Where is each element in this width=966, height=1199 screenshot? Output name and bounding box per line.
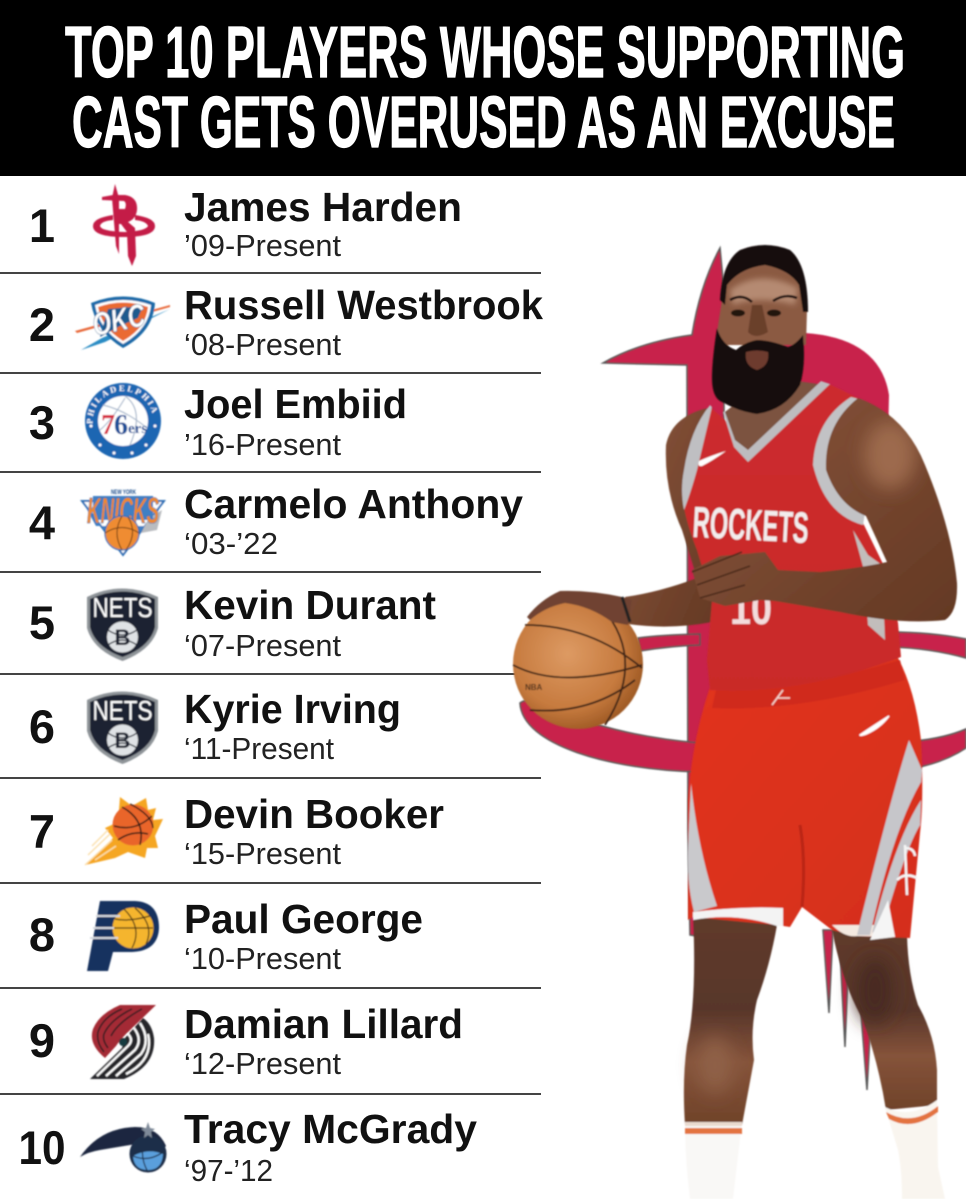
row 2: Russell Westbrook: Russell Westbrook [184, 282, 543, 328]
row 4: Carmelo Anthony: 4 [29, 496, 55, 549]
icon: 76ers logo: 6 [114, 410, 128, 441]
icon: Magic logo [80, 1122, 166, 1172]
row 10: Tracy McGrady: Tracy McGrady [184, 1106, 477, 1152]
jersey: ROCKETS [691, 498, 810, 553]
head [712, 245, 808, 414]
row 10: Tracy McGrady: ‘97-’12 [184, 1153, 273, 1188]
row 4: Carmelo Anthony: Carmelo Anthony [184, 481, 523, 527]
row 5: Kevin Durant: 5 [29, 596, 55, 649]
row 3: Joel Embiid: ’16-Present [184, 427, 341, 462]
basketball: NBA [525, 683, 543, 692]
icon: 76ers logo: 7 [101, 410, 115, 441]
legs [684, 915, 937, 1125]
row 9: Damian Lillard: Damian Lillard [184, 1001, 463, 1047]
icon: 76ers logo [84, 382, 162, 460]
eyes and brows [730, 296, 797, 302]
row 7: Devin Booker: ‘15-Present [184, 836, 341, 871]
row 8: Paul George: 8 [29, 908, 55, 961]
row 10: Tracy McGrady [18, 1106, 477, 1188]
icon: Nets logo [87, 692, 158, 764]
row 9: Damian Lillard [29, 1001, 463, 1081]
row 10: Tracy McGrady: 10 [18, 1121, 66, 1174]
row 5: Kevin Durant: ‘07-Present [184, 628, 341, 663]
row 1: James Harden [29, 184, 462, 266]
hair [720, 245, 808, 312]
row 3: Joel Embiid [29, 381, 407, 462]
socks [685, 1100, 945, 1199]
title banner [0, 0, 966, 176]
mouth [746, 350, 768, 370]
row 2: Russell Westbrook: ‘08-Present [184, 327, 341, 362]
icon: Knicks logo: NEW YORK [111, 490, 136, 496]
dribbling hand [527, 591, 632, 625]
icon: Pacers logo [87, 901, 159, 971]
row 8: Paul George: ‘10-Present [184, 941, 341, 976]
row 5: Kevin Durant: Kevin Durant [184, 582, 436, 628]
basketball [513, 599, 643, 729]
row 7: Devin Booker: 7 [29, 805, 55, 858]
front arm [692, 398, 957, 621]
row 8: Paul George [29, 896, 423, 976]
row 4: Carmelo Anthony: ‘03-’22 [184, 526, 278, 561]
jersey [682, 381, 901, 691]
row 1: James Harden: ’09-Present [184, 228, 341, 263]
row 6: Kyrie Irving: Kyrie Irving [184, 686, 401, 732]
background Rockets logo [520, 248, 966, 1090]
row 1: James Harden: James Harden [184, 184, 462, 230]
row 7: Devin Booker: Devin Booker [184, 791, 444, 837]
player: James Harden [513, 245, 957, 1199]
back arm: left shoulder and forearm [625, 407, 720, 627]
row 1: James Harden: 1 [29, 199, 55, 252]
row 3: Joel Embiid: Joel Embiid [184, 381, 407, 427]
row 4: Carmelo Anthony [29, 481, 523, 561]
icon: Suns logo [85, 797, 163, 865]
jersey: 10 [730, 582, 772, 634]
shorts [688, 658, 922, 940]
row 6: Kyrie Irving [29, 686, 401, 766]
row 8: Paul George: Paul George [184, 896, 423, 942]
row 2: Russell Westbrook [29, 282, 543, 362]
row 6: Kyrie Irving: 6 [29, 700, 55, 753]
icon: Thunder logo [75, 296, 170, 350]
icon: 76ers logo: ers [128, 421, 147, 437]
beard [712, 328, 804, 414]
row 9: Damian Lillard: ‘12-Present [184, 1046, 341, 1081]
icon: Rockets logo [93, 184, 155, 266]
icon: Nets logo [87, 588, 158, 661]
icon: Knicks logo: KNICKS [87, 490, 159, 531]
icon: Trail Blazers logo [90, 1005, 156, 1079]
stem, crossbar and R bowl [603, 248, 889, 1090]
row 6: Kyrie Irving: ‘11-Present [184, 731, 334, 766]
icon: Thunder logo: OKC [89, 296, 149, 343]
row 2: Russell Westbrook: 2 [29, 298, 55, 351]
neck and chest [725, 380, 818, 450]
row 5: Kevin Durant [29, 582, 436, 663]
row 7: Devin Booker [29, 791, 444, 871]
icon: Knicks logo [82, 490, 164, 555]
row 3: Joel Embiid: 3 [29, 396, 55, 449]
ring [520, 632, 966, 772]
icon: 76ers logo: PHILADELPHIA [86, 384, 158, 424]
row 9: Damian Lillard: 9 [29, 1014, 55, 1067]
